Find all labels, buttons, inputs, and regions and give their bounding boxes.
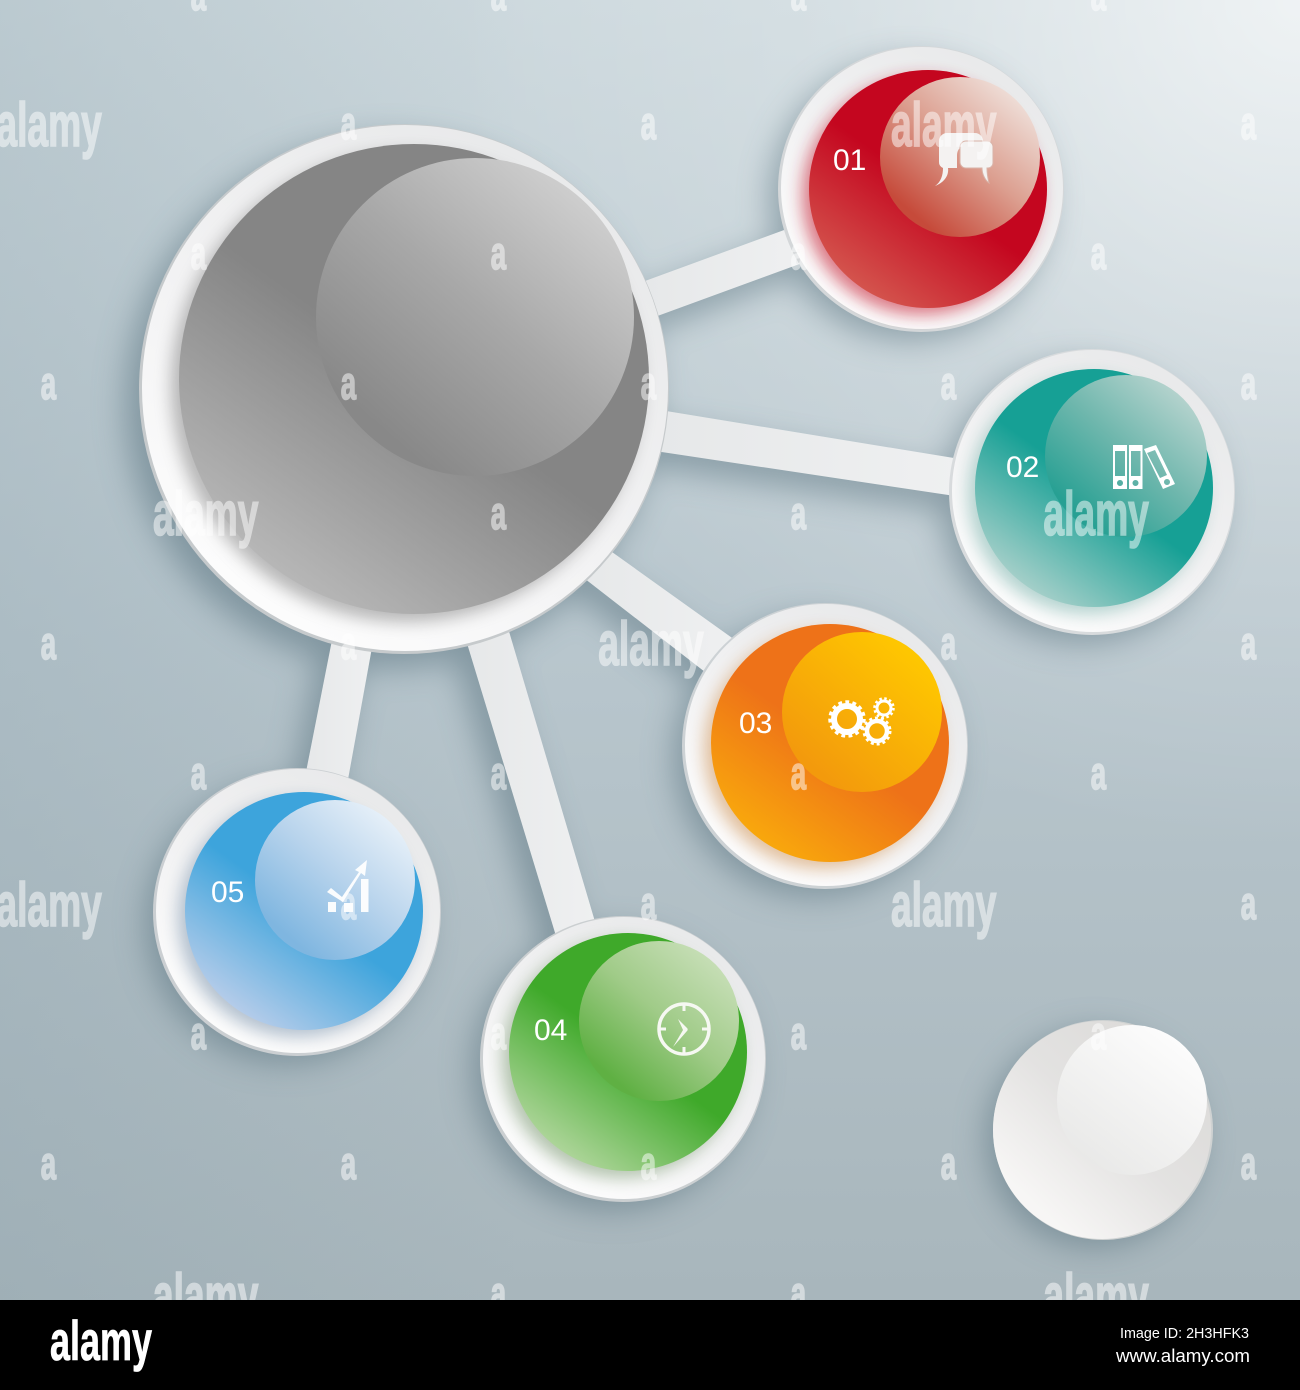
connector: hub to 02 <box>655 410 960 496</box>
icon: clock <box>659 1004 709 1054</box>
item 04 <box>480 916 766 1202</box>
footer bar <box>0 1300 1300 1390</box>
watermark: alamy <box>891 870 997 939</box>
image id: Image ID: 2H3HFK3 <box>1120 1325 1249 1342</box>
website: www.alamy.com <box>1115 1346 1250 1366</box>
hub highlight <box>316 158 634 476</box>
watermark: alamy <box>153 1261 259 1330</box>
watermark: aaaa <box>191 749 1107 800</box>
icon: growth chart <box>327 860 368 912</box>
watermark: aaaa <box>191 1009 1107 1060</box>
watermark: alamy <box>891 90 997 159</box>
connector: hub to 05 <box>305 635 373 785</box>
watermark: alamy <box>1043 479 1149 548</box>
watermark: alamy <box>153 479 259 548</box>
item 05 <box>153 768 441 1056</box>
watermark: aaa <box>341 99 1257 150</box>
plain grey sphere <box>993 1020 1213 1240</box>
sphere highlight <box>1057 1025 1207 1175</box>
icon: speech bubbles <box>935 133 993 186</box>
watermark: aaaaa <box>41 359 1257 410</box>
watermark: aaaaa <box>41 1139 1257 1190</box>
number 04: 04 <box>534 1014 567 1047</box>
soft shadows <box>125 60 1221 1247</box>
number 05: 05 <box>211 876 244 909</box>
item 02 <box>949 349 1235 635</box>
icon: binders <box>1113 445 1175 489</box>
connector: hub to 04 <box>466 628 596 936</box>
connector bars <box>305 226 960 936</box>
number 03: 03 <box>739 707 772 740</box>
connector: hub to 01 <box>645 226 805 318</box>
watermark: aaaa <box>41 619 1257 670</box>
number 02: 02 <box>1006 451 1039 484</box>
icon: gears <box>830 698 894 744</box>
item 01 <box>778 46 1064 332</box>
watermark: aaaa <box>191 229 1107 280</box>
number 01: 01 <box>833 144 866 177</box>
watermark: aa <box>491 489 807 540</box>
watermark: aa <box>491 1269 807 1320</box>
watermark: aaa <box>341 879 1257 930</box>
footer logo: alamy <box>50 1309 152 1372</box>
watermark: alamy <box>598 609 704 678</box>
item 03 <box>682 603 968 889</box>
connector: hub to 03 <box>580 547 735 672</box>
central hub circle <box>139 124 669 654</box>
watermark: alamy <box>1043 1261 1149 1330</box>
